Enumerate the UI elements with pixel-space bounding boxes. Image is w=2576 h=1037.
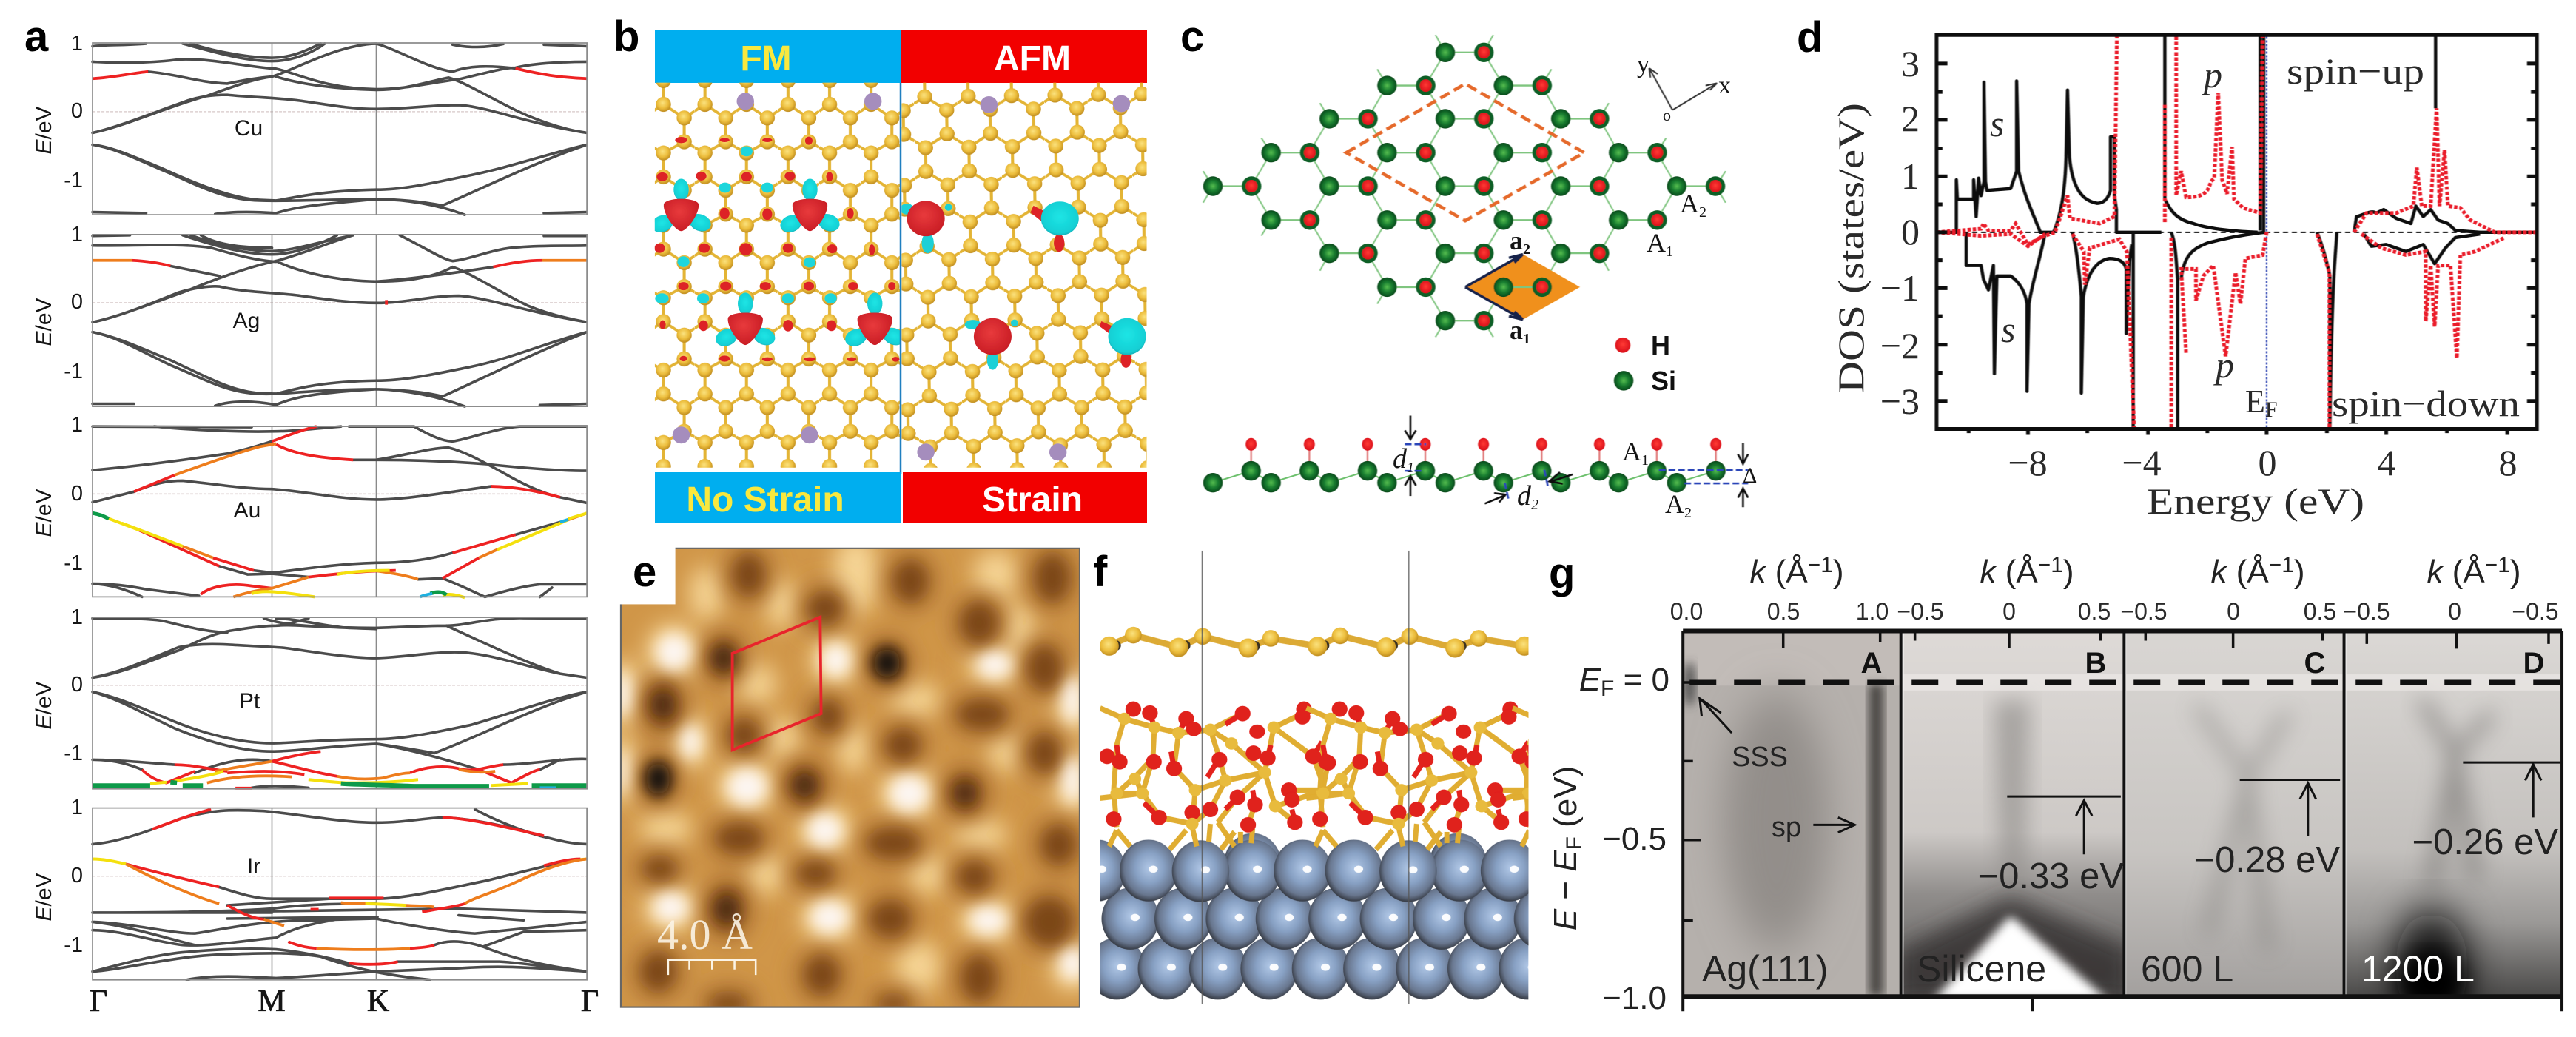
subpanel letters [1861, 647, 2544, 679]
structure annotations: 2 [1699, 204, 1706, 221]
annotations in spectra: 1200 L [2361, 948, 2475, 990]
x ticks: −4 [2122, 442, 2162, 483]
k tick labels: −0.5 [2120, 598, 2168, 625]
x ticks: −8 [2008, 442, 2048, 483]
legend atoms [1614, 338, 1633, 391]
y ticks: 3 [1901, 43, 1920, 84]
axis labels: E/eV: E/eV [32, 873, 56, 922]
k axis titles: −1 [2485, 553, 2510, 577]
energy axis labels: −0.5 [1602, 821, 1667, 857]
k tick labels: 1.0 [1856, 598, 1889, 625]
k tick labels: 0 [2227, 598, 2240, 625]
structure annotations: 1 [1666, 244, 1673, 260]
panel b: spin density on strained lattice [613, 13, 1147, 523]
scale text: 4.0 Å [657, 910, 753, 959]
axis labels: energy ticks: 0 [71, 99, 83, 123]
structure annotations: d [1517, 480, 1531, 511]
annotations in spectra: −0.33 eV [1977, 856, 2124, 896]
y ticks: −1 [1880, 267, 1920, 309]
axis labels: energy ticks [64, 32, 83, 957]
x ticks: 4 [2377, 442, 2396, 483]
axis labels: energy ticks: 0 [71, 864, 83, 887]
metal labels: Cu [235, 116, 263, 141]
axis labels: energy ticks: 0 [71, 482, 83, 506]
annotations in spectra: Silicene [1917, 948, 2046, 990]
orbital and spin labels: p [2202, 54, 2222, 95]
cell boundary lines [1203, 551, 1409, 1004]
k tick labels: −0.5 [1897, 598, 1944, 625]
energy axis labels: E [1579, 662, 1601, 698]
annotations in spectra: SSS [1732, 742, 1788, 773]
axis labels: E/eV [32, 106, 56, 922]
atomic lattice with spin lobes [648, 83, 1147, 468]
x ticks: 0 [2259, 442, 2276, 483]
lattice vector arrows [1465, 255, 1523, 320]
energy axis labels: −1.0 [1602, 980, 1667, 1016]
axis labels: E/eV: E/eV [32, 681, 56, 730]
k axis titles: −1 [1808, 553, 1833, 577]
metal labels [233, 116, 263, 879]
label backing [616, 543, 676, 604]
chart: Ag band structure [93, 235, 587, 406]
k tick labels: 0.5 [2078, 598, 2111, 625]
metal labels: Au [234, 498, 260, 523]
structure annotations: A [1680, 189, 1699, 218]
chart: Cu band structure [93, 43, 587, 215]
k tick labels: 0.0 [1670, 598, 1703, 625]
subpanel letters: C [2304, 647, 2325, 679]
energy axis labels: = 0 [1614, 662, 1669, 698]
orbital and spin labels: p [2213, 344, 2234, 386]
left lattice FM [648, 83, 908, 468]
energy axis labels: F [1601, 677, 1614, 701]
k axis titles: ) [2510, 554, 2521, 590]
label a: a [24, 13, 49, 61]
orbital and spin labels [1990, 50, 2520, 424]
right lattice AFM [900, 83, 1147, 468]
orbital and spin labels: F [2265, 397, 2278, 422]
k tick labels: −0.5 [2343, 598, 2390, 625]
ARPES maps [1683, 631, 2562, 1021]
panel g: ARPES spectra [1547, 549, 2562, 1021]
structure annotations: y [1637, 51, 1649, 78]
panel d: density of states [1797, 13, 2537, 522]
structure annotations: x [1718, 72, 1731, 99]
STM heatmap [615, 540, 1085, 1012]
label f: f [1093, 548, 1108, 596]
panel f: silicene on SiO2 on metal model [1094, 551, 1529, 1004]
axis labels: energy ticks: -1 [64, 360, 83, 383]
label c: c [1180, 13, 1204, 61]
k axis titles: k (Å [2210, 554, 2269, 590]
annotations in spectra: −0.28 eV [2193, 840, 2340, 880]
k tick labels [1670, 598, 2559, 625]
k axis titles: k (Å [1980, 554, 2038, 590]
subpanel D 1200 L [2346, 631, 2562, 1021]
k axis titles [1749, 553, 2521, 590]
energy axis labels: F [1562, 836, 1587, 850]
legend text [1651, 330, 1676, 396]
xy axes [1649, 68, 1717, 110]
frame, dashed Fermi level, ticks and arrows [1683, 631, 2562, 1011]
header bars FM and AFM: FM [740, 39, 792, 78]
k axis titles: k (Å [2427, 554, 2485, 590]
annotations in spectra: 600 L [2141, 948, 2233, 990]
header bars FM and AFM: AFM [994, 39, 1071, 78]
subpanel B Silicene [1897, 631, 2131, 1000]
DOS chart [1937, 35, 2537, 435]
atomic slab model [1100, 551, 1529, 1004]
orange unit cell [1465, 255, 1580, 320]
label g: g [1549, 549, 1575, 597]
structure annotations: A [1622, 437, 1641, 466]
k axis titles: ) [1833, 554, 1844, 590]
structure annotations: d [1393, 443, 1407, 474]
y ticks: 1 [1901, 155, 1920, 197]
panel c: hydrogenated silicene structure [1180, 13, 1757, 521]
k axis titles: ) [2294, 554, 2305, 590]
annotations in spectra: sp [1772, 812, 1801, 843]
subpanel letters: B [2085, 647, 2106, 679]
k axis titles: −1 [2269, 553, 2294, 577]
axis labels: energy ticks: -1 [64, 551, 83, 575]
k-path labels: M [258, 984, 286, 1018]
structure annotations [1393, 51, 1757, 521]
annotations in spectra: Ag(111) [1702, 948, 1828, 990]
axis labels: energy ticks: 1 [71, 413, 83, 437]
y ticks: −2 [1880, 325, 1920, 366]
subpanel letters: A [1861, 647, 1882, 679]
metal labels: Pt [239, 689, 260, 714]
axis labels: energy ticks: -1 [64, 742, 83, 765]
k tick labels: 0.5 [1767, 598, 1800, 625]
x axis title: Energy (eV) [2147, 480, 2364, 522]
metal labels: Ir [247, 854, 260, 879]
structure annotations: 2 [1531, 497, 1538, 513]
orbital and spin labels: E [2245, 383, 2265, 420]
dashed supercell [1346, 84, 1584, 221]
orbital and spin labels: s [2001, 309, 2015, 350]
orbital and spin labels: spin−down [2332, 383, 2520, 424]
subpanel C 600 L [2126, 631, 2344, 996]
legend text: H [1651, 330, 1670, 360]
y axis title: DOS (states/eV) [1830, 103, 1872, 393]
k-path labels [90, 984, 599, 1018]
x ticks [2008, 442, 2518, 483]
subpanel letters: D [2523, 647, 2544, 679]
y ticks: −3 [1880, 380, 1920, 422]
chart: Pt band structure [93, 617, 587, 789]
k-path labels: Γ [90, 984, 107, 1018]
panel e: STM image [615, 540, 1085, 1012]
structure annotations: A [1647, 228, 1666, 258]
energy axis labels: (eV) [1547, 766, 1584, 836]
y ticks: 2 [1901, 98, 1920, 139]
x ticks: 8 [2498, 442, 2518, 483]
energy axis labels: E − E [1547, 850, 1584, 930]
energy axis labels [1547, 662, 1669, 1016]
axis labels: E/eV: E/eV [32, 298, 56, 346]
side view [1203, 416, 1748, 507]
structure annotations: 1 [1407, 460, 1414, 476]
k axis titles: ) [2063, 554, 2074, 590]
axis labels: energy ticks: 1 [71, 605, 83, 629]
k axis titles: k (Å [1749, 554, 1808, 590]
structure annotations: 2 [1523, 241, 1530, 258]
axis labels: E/eV: E/eV [32, 489, 56, 537]
silicene sheet [1100, 627, 1534, 658]
chart: Ir band structure [93, 808, 587, 980]
structure annotations: Δ [1743, 463, 1757, 488]
label b: b [613, 13, 639, 61]
header bars FM and AFM [655, 30, 1147, 83]
k tick labels: 0 [2002, 598, 2016, 625]
orbital and spin labels: spin−up [2287, 50, 2424, 92]
annotations in spectra: −0.26 eV [2412, 822, 2558, 862]
annotations in spectra [1702, 742, 2558, 990]
legend text: Si [1651, 366, 1676, 396]
footer bars strain labels: No Strain [686, 480, 844, 520]
metal labels: Ag [233, 309, 260, 333]
footer bars strain labels: Strain [982, 480, 1083, 520]
axis labels: energy ticks: 0 [71, 673, 83, 697]
k-path labels: K [367, 984, 389, 1018]
k-path labels: Γ [581, 984, 599, 1018]
axis labels: E/eV: E/eV [32, 106, 56, 155]
axis labels: energy ticks: 0 [71, 290, 83, 314]
oxide network [1100, 701, 1529, 902]
structure annotations: 1 [1641, 452, 1649, 469]
k tick labels: 0.5 [2304, 598, 2336, 625]
footer bars strain labels [655, 472, 1147, 523]
structure annotations: o [1663, 106, 1671, 124]
chart: Au band structure [93, 426, 587, 597]
axis labels: energy ticks: 1 [71, 796, 83, 819]
orbital and spin labels: s [1990, 103, 2004, 144]
y ticks: 0 [1901, 211, 1920, 252]
axis labels: energy ticks: 1 [71, 223, 83, 246]
subpanel A Ag(111) [1683, 631, 1902, 996]
k tick labels: −0.5 [2512, 598, 2559, 625]
structure annotations: A [1665, 489, 1684, 519]
divider line [900, 83, 901, 474]
structure annotations: 1 [1523, 331, 1530, 347]
axis labels: energy ticks: -1 [64, 169, 83, 192]
k tick labels: 0 [2448, 598, 2461, 625]
structure annotations: a [1510, 226, 1523, 255]
axis labels: energy ticks: -1 [64, 933, 83, 957]
structure annotations: 2 [1684, 505, 1692, 521]
axis labels: energy ticks: 1 [71, 32, 83, 56]
k axis titles: −1 [2038, 553, 2063, 577]
panel a: band structures [24, 13, 599, 1018]
label e: e [633, 548, 656, 596]
structure annotations: a [1510, 315, 1523, 345]
label d: d [1797, 13, 1823, 61]
top view lattice [1203, 35, 1748, 507]
y ticks [1880, 43, 1920, 422]
